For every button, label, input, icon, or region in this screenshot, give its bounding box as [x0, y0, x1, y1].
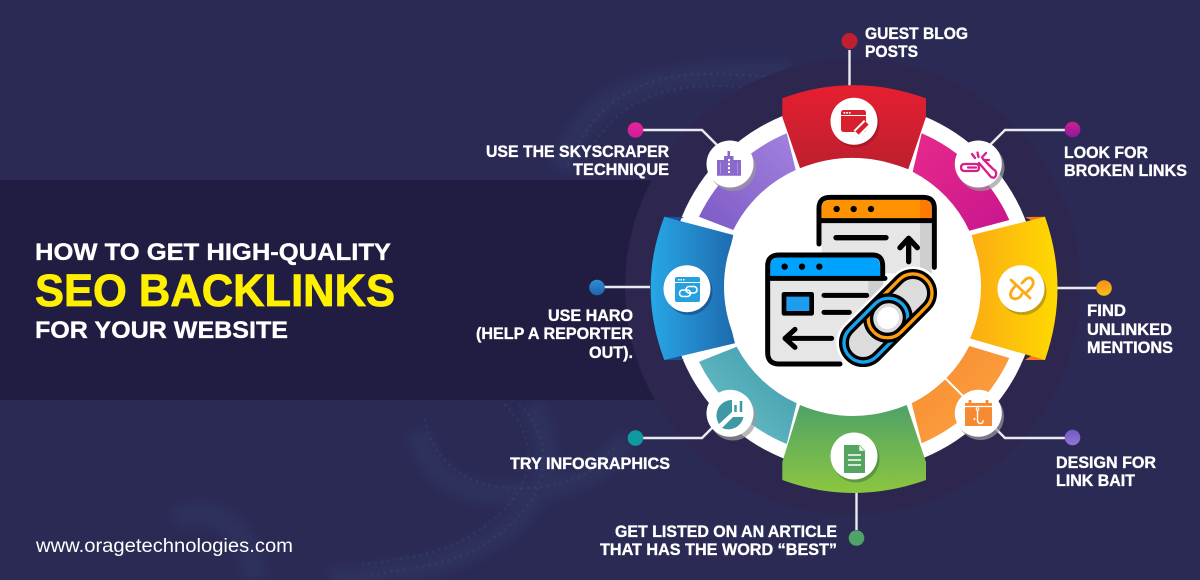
segment: green [782, 405, 926, 493]
label: design for link bait: LINK BAIT [1056, 472, 1135, 490]
connector lines [603, 50, 1098, 530]
dark title band [0, 180, 660, 400]
label: find unlinked mentions: MENTIONS [1087, 339, 1173, 357]
back window [819, 197, 934, 273]
label: get listed on an article: GET LISTED ON AN ARTICLE [615, 523, 837, 541]
label: look for broken links: LOOK FOR [1064, 144, 1148, 162]
label: use haro: USE HARO [548, 307, 633, 325]
icon: guest blog window and pen [830, 98, 880, 148]
label: find unlinked mentions: FIND [1087, 302, 1126, 320]
title [35, 239, 395, 344]
icon: central browser windows and chain [765, 194, 938, 367]
label: get listed on an article [600, 523, 837, 559]
label: guest blog posts: GUEST BLOG [865, 25, 968, 43]
front window [768, 255, 885, 364]
label: find unlinked mentions [1087, 302, 1173, 357]
segment: purple [699, 133, 796, 230]
label: try infographics: TRY INFOGRAPHICS [510, 455, 670, 473]
website url: www.oragetechnologies.com [35, 536, 293, 557]
white ring [668, 102, 1038, 472]
title: FOR YOUR WEBSITE [35, 317, 288, 344]
segment: blue [651, 217, 735, 360]
label: look for broken links [1064, 144, 1187, 180]
icon: window with links [664, 265, 712, 315]
icon: unlinked chain [998, 265, 1046, 315]
icon: broken link [955, 140, 1004, 191]
icon: skyscraper [706, 140, 756, 191]
segment: yellow [969, 217, 1058, 360]
segment: teal [699, 347, 797, 444]
segment: magenta [913, 133, 1009, 231]
icon: document [830, 432, 880, 482]
chain links [836, 266, 938, 367]
label: guest blog posts [865, 25, 968, 61]
label: use haro: OUT). [589, 344, 633, 362]
label: look for broken links: BROKEN LINKS [1064, 162, 1187, 180]
label: guest blog posts: POSTS [865, 43, 918, 61]
label: use the skyscraper technique: USE THE SKYSCRAPER [486, 143, 669, 161]
background dotted network pattern [360, 74, 805, 575]
label: find unlinked mentions: UNLINKED [1087, 321, 1172, 339]
fold corners [664, 217, 1045, 360]
label: design for link bait: DESIGN FOR [1056, 454, 1156, 472]
dark disc behind wheel [625, 59, 1081, 515]
node dots [589, 33, 1112, 546]
segment: red [782, 85, 926, 169]
label: use haro [476, 307, 633, 362]
label: get listed on an article: THAT HAS THE WORD “BEST” [600, 541, 837, 559]
icon: calendar with hook [955, 390, 1004, 440]
label: use the skyscraper technique [486, 143, 669, 179]
label: design for link bait [1056, 454, 1156, 490]
title: HOW TO GET HIGH-QUALITY [35, 239, 391, 266]
segment: orange [912, 346, 1009, 443]
wheel [651, 85, 1058, 493]
label: use haro: (HELP A REPORTER [476, 325, 633, 343]
background glow pattern [175, 72, 790, 580]
label: use the skyscraper technique: TECHNIQUE [573, 161, 669, 179]
center circle [724, 158, 981, 415]
icon: chart pie [706, 390, 756, 440]
title: SEO BACKLINKS [35, 265, 395, 316]
white divider in orange segment [945, 378, 968, 401]
